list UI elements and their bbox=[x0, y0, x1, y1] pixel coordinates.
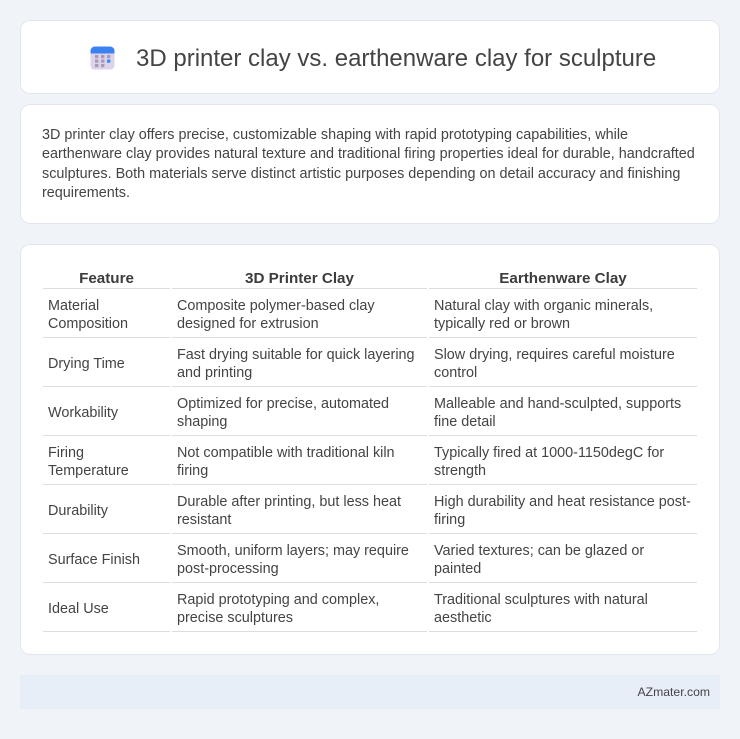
earthenware clay: firing temperature: strength bbox=[434, 463, 486, 479]
header: Feature: Feature bbox=[79, 270, 134, 287]
3D printer clay: durability: resistant bbox=[177, 512, 231, 528]
3D printer clay: firing temperature bbox=[177, 445, 395, 479]
table card bbox=[20, 244, 720, 655]
earthenware clay: surface finish: painted bbox=[434, 561, 481, 577]
earthenware clay: durability: High durability and heat resistance post- bbox=[434, 494, 691, 510]
3D printer clay: surface finish bbox=[177, 543, 409, 577]
row: Surface Finish: Surface Finish bbox=[48, 552, 140, 568]
row: Ideal Use: Ideal Use bbox=[48, 601, 109, 617]
earthenware clay: firing temperature bbox=[434, 445, 664, 479]
summary text: earthenware clay provides natural texture and traditional firing properties ideal for durable, handcrafted bbox=[42, 146, 695, 162]
row: Drying Time: Drying Time bbox=[48, 356, 125, 372]
title: 3D printer clay vs. earthenware clay for sculpture bbox=[136, 45, 656, 72]
earthenware clay: durability bbox=[434, 494, 691, 528]
3D printer clay: workability: shaping bbox=[177, 414, 227, 430]
3D printer clay: material composition: Composite polymer-based clay bbox=[177, 298, 375, 314]
earthenware clay: ideal use: aesthetic bbox=[434, 610, 492, 626]
3D printer clay: drying time bbox=[177, 347, 415, 381]
earthenware clay: drying time: Slow drying, requires careful moisture bbox=[434, 347, 675, 363]
header: 3D Printer Clay: 3D Printer Clay bbox=[245, 270, 354, 287]
earthenware clay: ideal use: Traditional sculptures with natural bbox=[434, 592, 648, 608]
row: Firing Temperature bbox=[48, 445, 129, 479]
earthenware clay: durability: firing bbox=[434, 512, 465, 528]
header: Earthenware Clay: Earthenware Clay bbox=[499, 270, 627, 287]
earthenware clay: drying time bbox=[434, 347, 675, 381]
summary text: requirements. bbox=[42, 185, 130, 201]
row: Material Composition: Material bbox=[48, 298, 99, 314]
3D printer clay: firing temperature: firing bbox=[177, 463, 208, 479]
3D printer clay: drying time: Fast drying suitable for quick layering bbox=[177, 347, 415, 363]
earthenware clay: firing temperature: Typically fired at 1000-1150degC for bbox=[434, 445, 664, 461]
earthenware clay: material composition bbox=[434, 298, 653, 332]
3D printer clay: workability bbox=[177, 396, 389, 430]
earthenware clay: material composition: typically red or brown bbox=[434, 316, 570, 332]
3D printer clay: durability: Durable after printing, but less heat bbox=[177, 494, 401, 510]
row: Durability: Durability bbox=[48, 503, 108, 519]
row: Material Composition: Composition bbox=[48, 316, 128, 332]
footer credit: AZmater.com bbox=[638, 685, 710, 699]
3D printer clay: ideal use: precise sculptures bbox=[177, 610, 293, 626]
earthenware clay: surface finish bbox=[434, 543, 644, 577]
row: Workability: Workability bbox=[48, 405, 118, 421]
3D printer clay: ideal use: Rapid prototyping and complex, bbox=[177, 592, 379, 608]
title card bbox=[20, 20, 720, 94]
summary text: 3D printer clay offers precise, customizable shaping with rapid prototyping capabilities, while bbox=[42, 127, 628, 143]
row: Firing Temperature: Firing bbox=[48, 445, 84, 461]
summary text bbox=[42, 127, 695, 201]
3D printer clay: surface finish: post-processing bbox=[177, 561, 279, 577]
3D printer clay: drying time: and printing bbox=[177, 365, 252, 381]
3D printer clay: surface finish: Smooth, uniform layers; may require bbox=[177, 543, 409, 559]
row: Material Composition bbox=[48, 298, 128, 332]
3D printer clay: ideal use bbox=[177, 592, 379, 626]
earthenware clay: surface finish: Varied textures; can be glazed or bbox=[434, 543, 644, 559]
earthenware clay: ideal use bbox=[434, 592, 648, 626]
earthenware clay: workability: Malleable and hand-sculpted, supports bbox=[434, 396, 681, 412]
3D printer clay: firing temperature: Not compatible with traditional kiln bbox=[177, 445, 395, 461]
earthenware clay: workability: fine detail bbox=[434, 414, 496, 430]
earthenware clay: workability bbox=[434, 396, 681, 430]
3D printer clay: material composition: designed for extrusion bbox=[177, 316, 319, 332]
icon: calendar bbox=[90, 46, 114, 70]
footer bar bbox=[20, 675, 720, 709]
3D printer clay: durability bbox=[177, 494, 401, 528]
earthenware clay: drying time: control bbox=[434, 365, 477, 381]
summary text: sculptures. Both materials serve distinct artistic purposes depending on detail accuracy and finishing bbox=[42, 166, 680, 182]
3D printer clay: material composition bbox=[177, 298, 375, 332]
row: Firing Temperature: Temperature bbox=[48, 463, 129, 479]
3D printer clay: workability: Optimized for precise, automated bbox=[177, 396, 389, 412]
summary card bbox=[20, 104, 720, 224]
earthenware clay: material composition: Natural clay with organic minerals, bbox=[434, 298, 653, 314]
